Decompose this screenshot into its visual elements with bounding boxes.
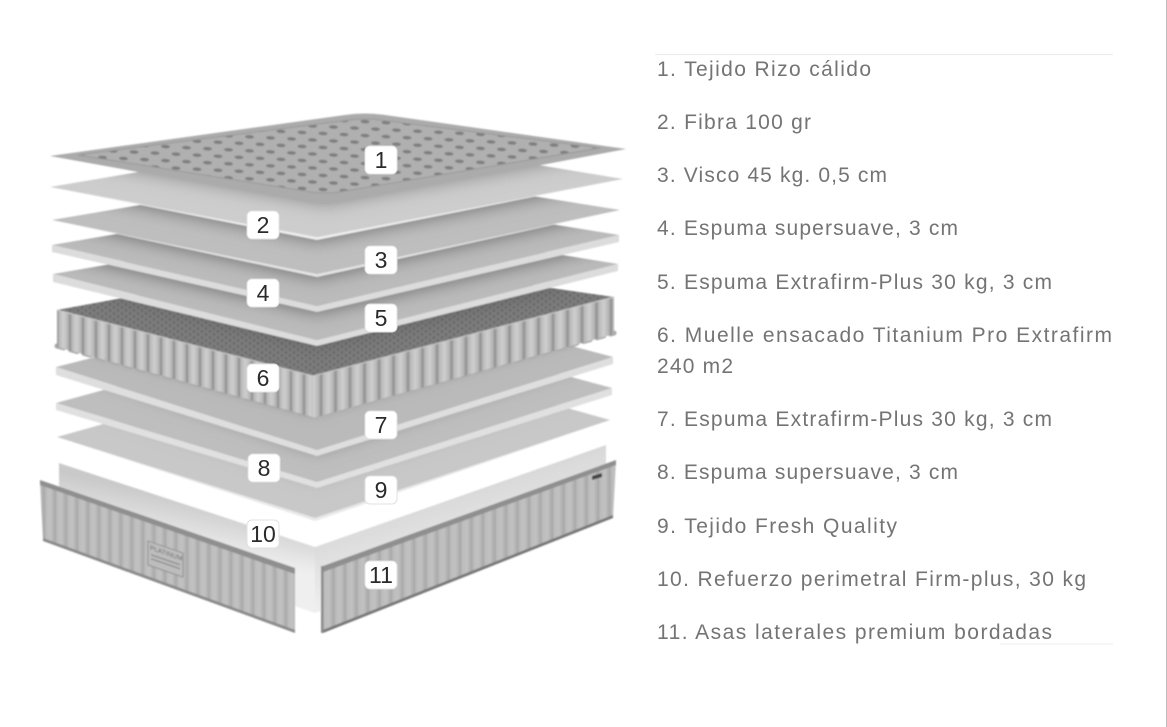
number badge 9 [365,476,397,504]
number badge 3: 3 [375,247,387,273]
number badge 7 [365,411,397,439]
number badge 4 [247,279,279,307]
layer 10: perimeter reinforcement [59,360,606,613]
layer 1: quilted top fabric [50,114,626,204]
number badge 11: 11 [369,562,393,588]
item 9: 9. Tejido Fresh Quality [657,515,898,538]
number badge 7: 7 [375,412,387,438]
number badge 3 [365,246,397,274]
item 4: 4. Espuma supersuave, 3 cm [657,217,958,240]
number badge 4: 4 [257,280,270,306]
layer 11: right side panel [321,460,616,633]
number badge 5: 5 [375,305,387,331]
item 3: 3. Visco 45 kg. 0,5 cm [657,164,887,187]
item 6: 240 m2 [657,355,733,378]
legend list [655,54,1113,645]
item 1: 1. Tejido Rizo cálido [657,58,871,81]
item 5: 5. Espuma Extrafirm-Plus 30 kg, 3 cm [657,271,1052,294]
small dark tag [592,473,602,480]
layer 4: super-soft foam [52,224,620,313]
number badge 2 [247,211,279,239]
item 11: 11. Asas laterales premium bordadas [657,621,1052,644]
layer 7: extrafirm foam [56,346,614,456]
layer 3: visco foam [52,196,620,278]
item 6 [657,324,1112,378]
layer 5: extrafirm foam [52,254,618,347]
right page edge line [1166,0,1167,727]
layer 9: fresh quality fabric [58,408,610,521]
item 6: 6. Muelle ensacado Titanium Pro Extrafirm [657,324,1112,347]
number badge 1: 1 [375,147,387,173]
number badge 1 [365,146,397,174]
number badge 6 [247,364,279,392]
embroidered platinum label [148,541,183,577]
layer 11: left side panel [40,480,295,633]
number badge 2: 2 [257,212,269,238]
layer 8: super-soft foam [56,376,612,488]
mattress exploded illustration [40,113,626,633]
number badge 5 [365,304,397,332]
number badge 8 [248,454,280,482]
embroidered platinum label: PLATINUM [150,545,183,563]
layer 2: fibre [51,164,622,241]
number badge 6: 6 [257,365,269,391]
number badge 11 [365,561,397,589]
number badge 9: 9 [375,477,387,503]
number badge 10: 10 [250,521,276,547]
item 2: 2. Fibra 100 gr [657,111,811,134]
number badge 8: 8 [258,455,270,481]
item 10: 10. Refuerzo perimetral Firm-plus, 30 kg [657,568,1086,591]
item 7: 7. Espuma Extrafirm-Plus 30 kg, 3 cm [657,408,1052,431]
item 8: 8. Espuma supersuave, 3 cm [657,461,958,484]
layer 6: pocket springs [54,287,618,418]
